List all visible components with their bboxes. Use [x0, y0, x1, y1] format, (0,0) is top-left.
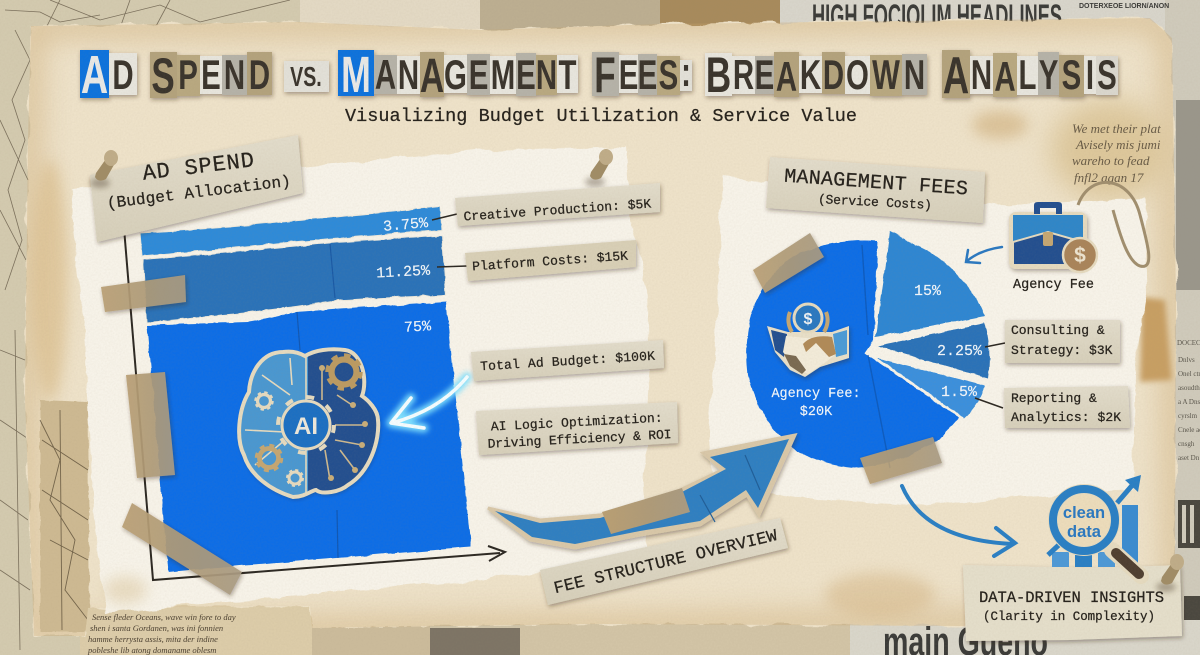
handwritten letter bottom — [87, 612, 236, 655]
icon: AI brain: AI — [294, 413, 318, 440]
label: total ad budget: Total Ad Budget: $100K — [480, 349, 656, 374]
title text: N — [536, 51, 557, 98]
title text: N — [398, 51, 419, 98]
chart axes — [124, 228, 505, 580]
title text: W — [872, 51, 900, 98]
bar: platform costs 11.25% — [143, 235, 446, 322]
slice percentages: 15% — [914, 283, 942, 300]
title text: S — [1097, 51, 1117, 98]
panel: ad spend sheet — [72, 147, 650, 612]
newspaper column text right: cyrslm — [1178, 412, 1198, 420]
arrow: briefcase to slice — [966, 247, 1002, 263]
arrow: pie to clean data — [902, 486, 1015, 556]
title text: D — [823, 51, 844, 98]
title text: T — [559, 51, 576, 98]
title text: E — [201, 51, 221, 98]
handwritten note on paper: wareho to fead — [1072, 153, 1150, 168]
label: AI logic optimization — [476, 402, 678, 455]
title text: A — [776, 53, 797, 100]
panel: management fees sheet — [708, 176, 1147, 506]
ribbon tape — [602, 488, 690, 534]
pie slice: 15% — [875, 232, 985, 337]
subtitle: Visualizing Budget Utilization & Service Value — [345, 106, 857, 127]
arrow: glowing pointer to brain — [391, 377, 467, 428]
fold creases — [297, 244, 338, 558]
handwritten note on paper: We met their plat — [1072, 121, 1161, 136]
pin: ad spend — [90, 150, 118, 188]
title text: B — [706, 48, 731, 104]
title text: A — [943, 45, 969, 105]
agency fee caption: $20K — [800, 405, 833, 420]
label: ad spend: AD SPEND — [141, 148, 255, 187]
leader lines — [975, 343, 1005, 408]
title text: N — [224, 51, 245, 98]
label: total ad budget — [471, 340, 664, 381]
title text: M — [341, 47, 371, 104]
title text: S — [151, 49, 175, 105]
title text: S — [659, 51, 678, 98]
hands — [783, 336, 836, 374]
icon: clean data magnifier and chart — [1048, 475, 1141, 576]
title — [80, 44, 1118, 105]
agency fee caption: Agency Fee: — [771, 387, 861, 402]
newspaper column text right: Dnlvs — [1178, 356, 1195, 364]
label: reporting and analytics — [1004, 386, 1130, 428]
trend arrow — [1048, 482, 1135, 555]
title text: VS. — [290, 62, 322, 93]
title text: E — [638, 51, 657, 98]
label: ad spend: (Budget Allocation) — [106, 173, 292, 213]
tape strips — [101, 233, 942, 595]
newspaper column text right — [1177, 339, 1200, 462]
label: management fees: MANAGEMENT FEES — [783, 166, 969, 201]
panel: management fees sheet: 2.25% — [937, 343, 983, 360]
title text: E — [469, 51, 488, 98]
label: reporting and analytics: Analytics: $2K — [1011, 410, 1121, 425]
title text: D — [249, 51, 270, 98]
icon: clean data magnifier and chart: data — [1067, 523, 1102, 541]
icon: AI brain — [235, 345, 383, 500]
handwritten letter bottom: hamme herrysta assis, mita der indine — [88, 634, 218, 644]
newspaper column text right: cnsgh — [1178, 440, 1195, 448]
title text: A — [81, 44, 108, 105]
gears — [328, 356, 360, 388]
label: fee structure overview: FEE STRUCTURE OVERVIEW — [552, 527, 780, 599]
icon: briefcase with dollar coin: $ — [1074, 244, 1086, 267]
title text: R — [733, 51, 754, 98]
title text: N — [971, 51, 992, 98]
handwritten letter bottom: pobleshe lib atong domaname oblesm — [87, 645, 216, 655]
panel: ad spend sheet: 75% — [404, 318, 433, 337]
map sheet left — [0, 0, 300, 655]
newspaper top right — [780, 0, 1200, 30]
arrow: fee structure ribbon — [488, 435, 795, 548]
newspaper column text right: aset Dn — [1178, 454, 1200, 462]
pin: data-driven insights — [1156, 554, 1184, 592]
title text: G — [444, 51, 467, 98]
leader lines — [432, 214, 467, 267]
title text: L — [1019, 51, 1037, 98]
label: data-driven insights: (Clarity in Complexity) — [983, 610, 1155, 624]
title text: P — [178, 51, 198, 98]
twine — [1078, 182, 1149, 266]
title text: D — [112, 51, 134, 98]
title text: F — [594, 48, 616, 104]
panel: management fees sheet: 1.5% — [941, 384, 978, 401]
icon: handshake with coin: $ — [804, 311, 813, 328]
background collage of maps, letters and newspapers: DOTERXEOE LIORN/ANON — [1079, 3, 1169, 10]
label: ad spend — [90, 135, 303, 242]
title text: Y — [1039, 51, 1058, 98]
central AI gear — [282, 401, 330, 449]
bottom strips — [80, 600, 312, 655]
pie slice: 2.25% — [877, 323, 989, 378]
pie slice: agency fee remainder — [747, 240, 960, 468]
title text: E — [755, 51, 774, 98]
bar: creative production 3.75% — [140, 207, 442, 256]
magnifier lens — [1048, 484, 1120, 556]
icon: clean data magnifier and chart: clean — [1063, 504, 1105, 522]
title text: A — [420, 48, 444, 102]
handwritten note on paper — [1072, 121, 1161, 185]
bar: total ad budget 75% — [147, 302, 471, 572]
title text: I — [1086, 51, 1094, 98]
newspaper column text right: a A Dns — [1178, 398, 1200, 406]
label: AI logic optimization: Driving Efficiency & ROI — [487, 427, 672, 452]
title text: : — [681, 48, 691, 95]
label: management fees: (Service Costs) — [818, 192, 932, 213]
lower left map patch — [40, 400, 90, 632]
chart bars — [1052, 552, 1069, 567]
label: reporting and analytics: Reporting & — [1011, 391, 1097, 406]
title text: K — [800, 51, 821, 98]
handwritten letter bottom: shen i santa Gordanen, was ini fonnien — [90, 623, 223, 633]
coin with laurels — [788, 312, 828, 332]
newspaper column text right: asoudth — [1178, 384, 1200, 392]
pie slice: 1.5% — [877, 358, 985, 418]
title text: E — [516, 51, 536, 98]
percentage labels: 3.75% — [382, 215, 430, 236]
label: management fees — [766, 157, 985, 223]
handwritten note on paper: fnfl2 agan 17 — [1074, 170, 1144, 185]
icon: handshake with coin — [767, 304, 849, 377]
label: AI logic optimization: AI Logic Optimization: — [490, 411, 663, 435]
panel: ad spend sheet: 11.25% — [376, 263, 432, 282]
label: platform costs — [465, 240, 636, 281]
label: platform costs: Platform Costs: $15K — [472, 249, 629, 274]
icon: briefcase with dollar coin — [1009, 202, 1097, 272]
label: consulting and strategy: Consulting & — [1011, 323, 1105, 338]
label: consulting and strategy — [1005, 320, 1120, 363]
title text: A — [994, 53, 1016, 100]
label: data-driven insights: DATA-DRIVEN INSIGHTS — [979, 589, 1164, 607]
title text: E — [619, 51, 638, 98]
handwritten letter bottom: Sense fleder Oceans, wave win fore to day — [92, 612, 236, 622]
magnifier handle — [1112, 550, 1141, 576]
title text: O — [846, 51, 869, 98]
title text: A — [375, 51, 396, 98]
pin: sheet top right — [585, 149, 613, 187]
handwritten note on paper: Avisely mis jumi — [1075, 137, 1161, 152]
label: agency fee: Agency Fee — [1013, 278, 1094, 293]
map outlines — [0, 0, 290, 650]
label: creative production: Creative Production: $5K — [463, 196, 652, 225]
title text: M — [491, 51, 515, 98]
brown stain right edge — [1140, 297, 1172, 382]
title text: N — [904, 51, 925, 98]
label: creative production — [455, 183, 660, 226]
title text: S — [1062, 51, 1081, 98]
title letter tiles — [80, 50, 1118, 98]
label: data-driven insights — [963, 565, 1182, 641]
label: consulting and strategy: Strategy: $3K — [1011, 343, 1113, 358]
